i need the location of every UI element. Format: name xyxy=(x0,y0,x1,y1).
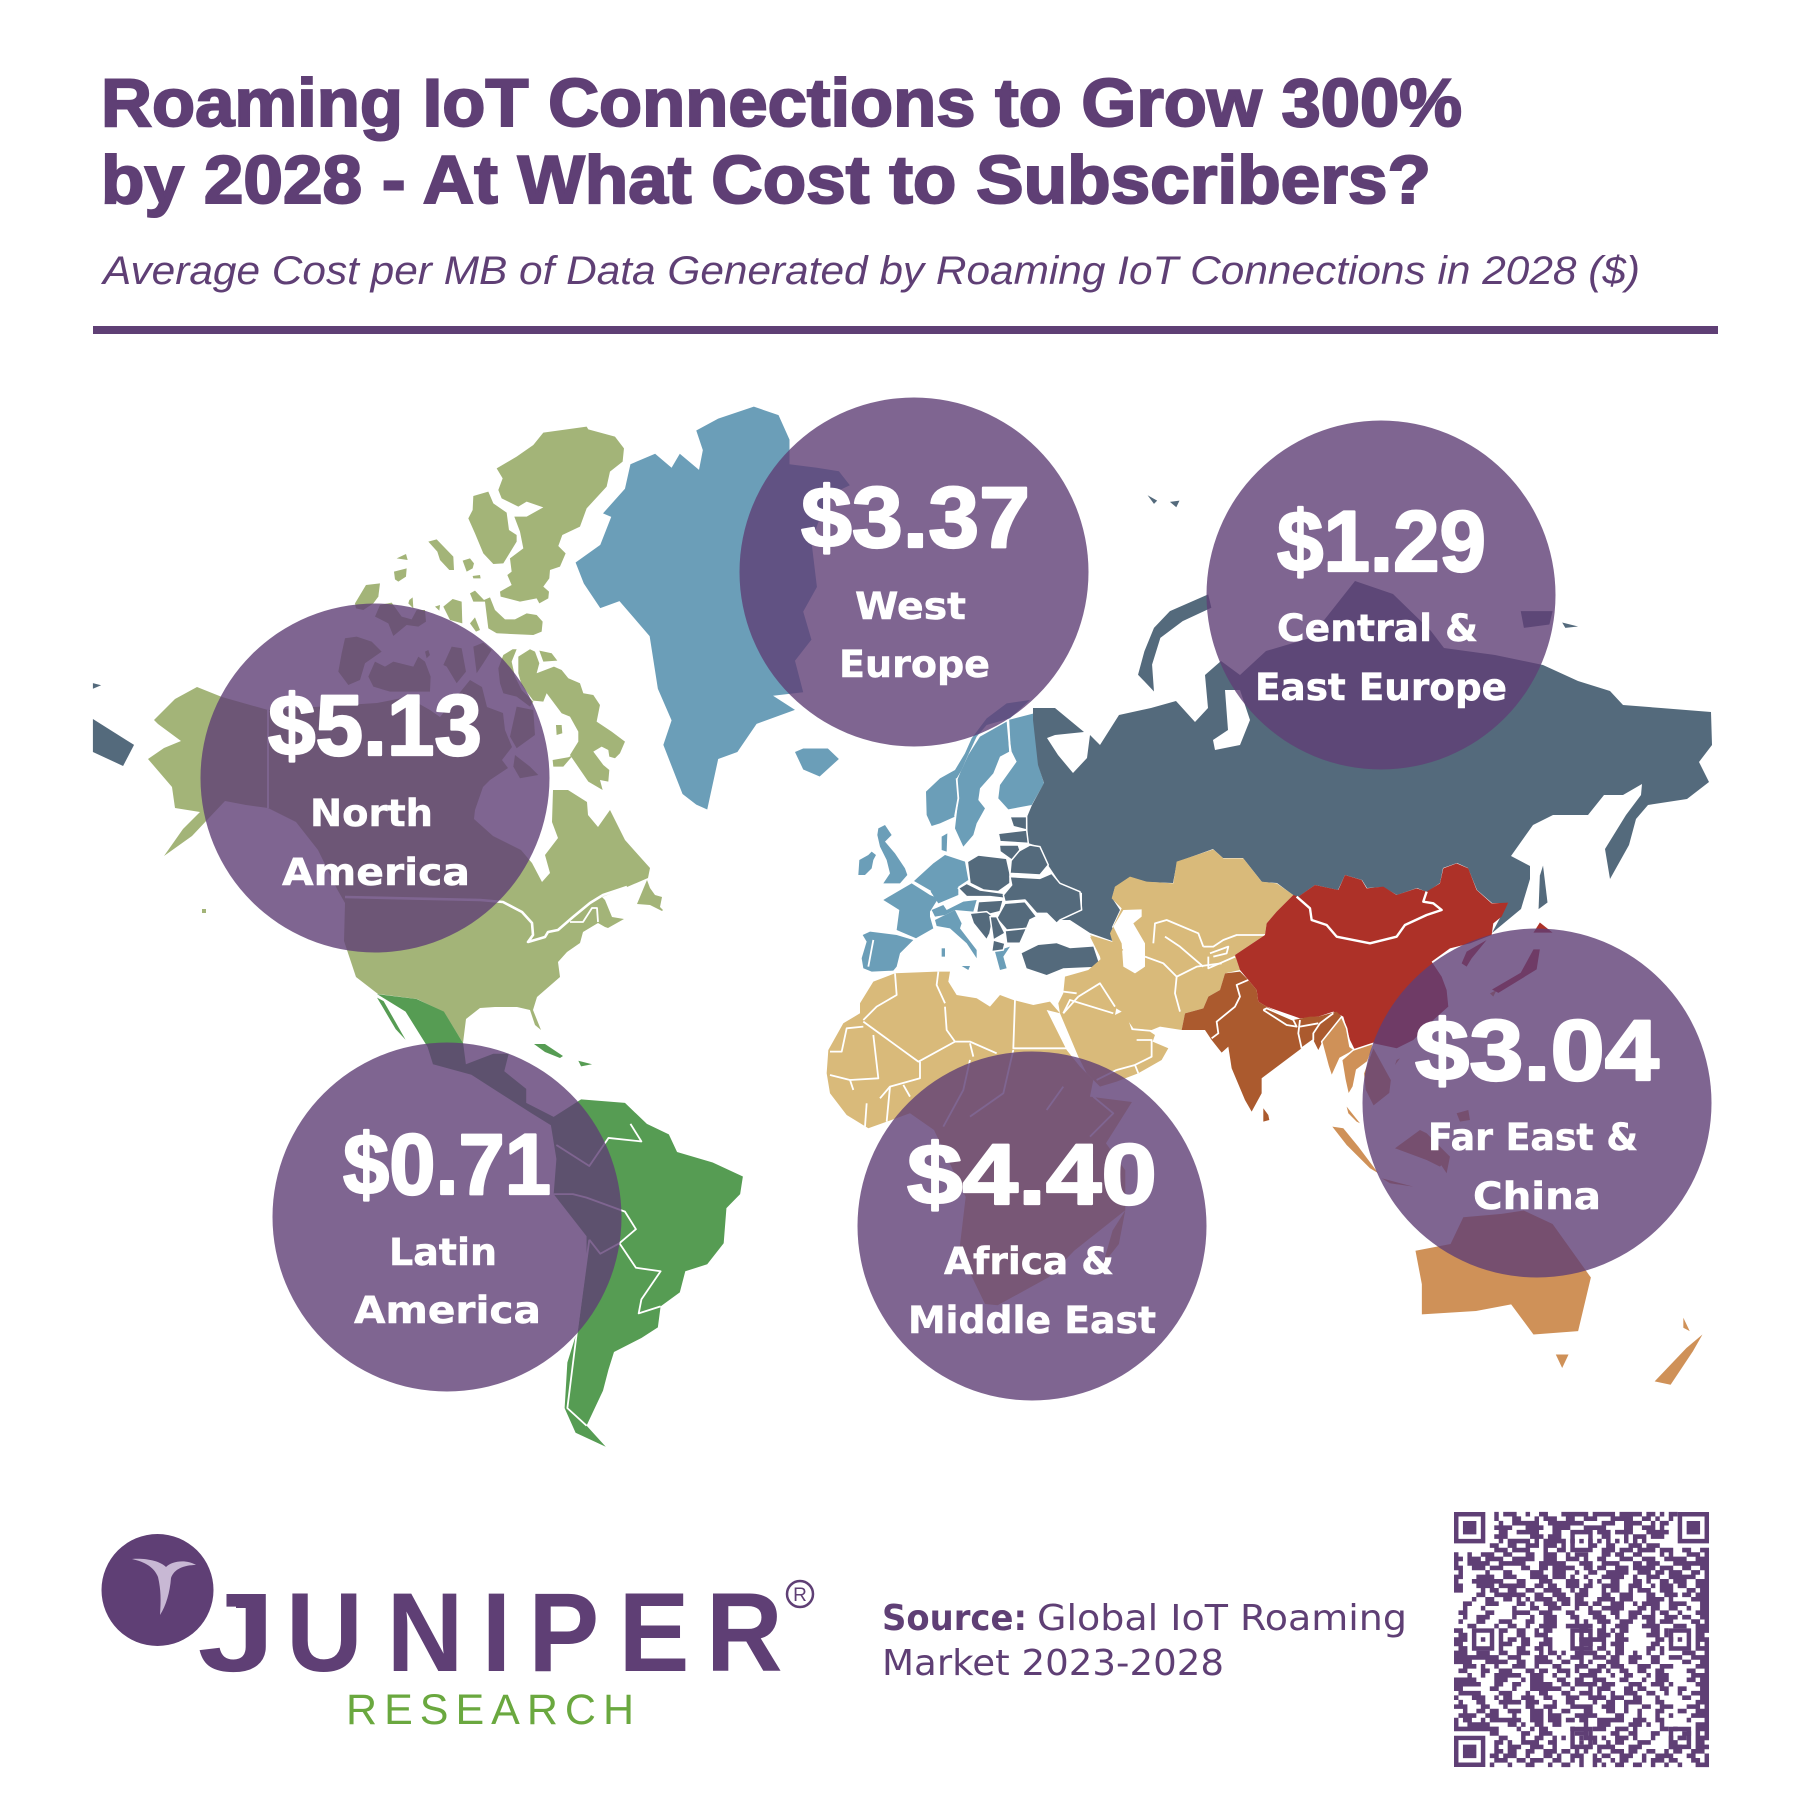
callout: Latin America xyxy=(272,1042,622,1392)
callout: Latin America: America xyxy=(354,1289,541,1332)
title: Roaming IoT Connections to Grow 300% xyxy=(101,65,1462,141)
callout: Africa and Middle East: Middle East xyxy=(908,1299,1156,1342)
callout: Central and East Europe: Central & xyxy=(1277,607,1478,650)
logo: Juniper Research: R xyxy=(793,1585,807,1606)
map region: Central and East Europe xyxy=(93,495,1712,975)
source note: Source: xyxy=(882,1598,1027,1639)
logo: Juniper Research: UNIPER xyxy=(286,1571,783,1696)
logo: Juniper Research xyxy=(102,1534,813,1734)
subtitle: Average Cost per MB of Data Generated by Roaming IoT Connections in 2028 ($) xyxy=(101,249,1640,293)
callout: North America: America xyxy=(282,851,470,894)
callout: Far East and China: $3.04 xyxy=(1415,1003,1659,1099)
source note: Market 2023-2028 xyxy=(882,1643,1224,1684)
callout: Central and East Europe: East Europe xyxy=(1255,666,1507,709)
callout: Africa and Middle East: $4.40 xyxy=(907,1127,1157,1223)
world map xyxy=(93,407,1712,1447)
callout: North America: North xyxy=(310,792,433,835)
callout: Central and East Europe xyxy=(1206,420,1556,770)
map region: China and Far East xyxy=(1182,863,1508,1187)
callout: West Europe: Europe xyxy=(839,643,990,686)
callout: Africa and Middle East: Africa & xyxy=(944,1240,1114,1283)
map region: North America xyxy=(148,427,663,1043)
title: by 2028 - At What Cost to Subscribers? xyxy=(101,142,1431,218)
callout: Central and East Europe: $1.29 xyxy=(1277,494,1486,590)
source note xyxy=(882,1598,1407,1684)
map region: West Europe xyxy=(576,407,1044,972)
callout: West Europe xyxy=(740,398,1088,746)
callout: West Europe: $3.37 xyxy=(801,470,1030,566)
callout: Latin America: Latin xyxy=(389,1231,497,1274)
QR code xyxy=(1454,1512,1709,1767)
map region: Latin America xyxy=(377,994,743,1447)
callout: North America xyxy=(200,604,550,952)
callout: North America: $5.13 xyxy=(268,678,482,774)
callout: Far East and China: Far East & xyxy=(1428,1116,1638,1159)
callout: Latin America: $0.71 xyxy=(343,1117,551,1213)
map region: Africa and Middle East xyxy=(827,849,1293,1305)
title xyxy=(101,65,1462,218)
callout: Africa and Middle East xyxy=(858,1052,1206,1400)
callout: West Europe: West xyxy=(855,585,966,628)
logo: Juniper Research: RESEARCH xyxy=(346,1686,634,1734)
icon: juniper emblem xyxy=(102,1534,214,1646)
logo: Juniper Research: J xyxy=(198,1569,275,1695)
source note: Global IoT Roaming xyxy=(1037,1598,1407,1639)
callout: Far East and China xyxy=(1362,928,1712,1278)
callout: Far East and China: China xyxy=(1473,1175,1601,1218)
